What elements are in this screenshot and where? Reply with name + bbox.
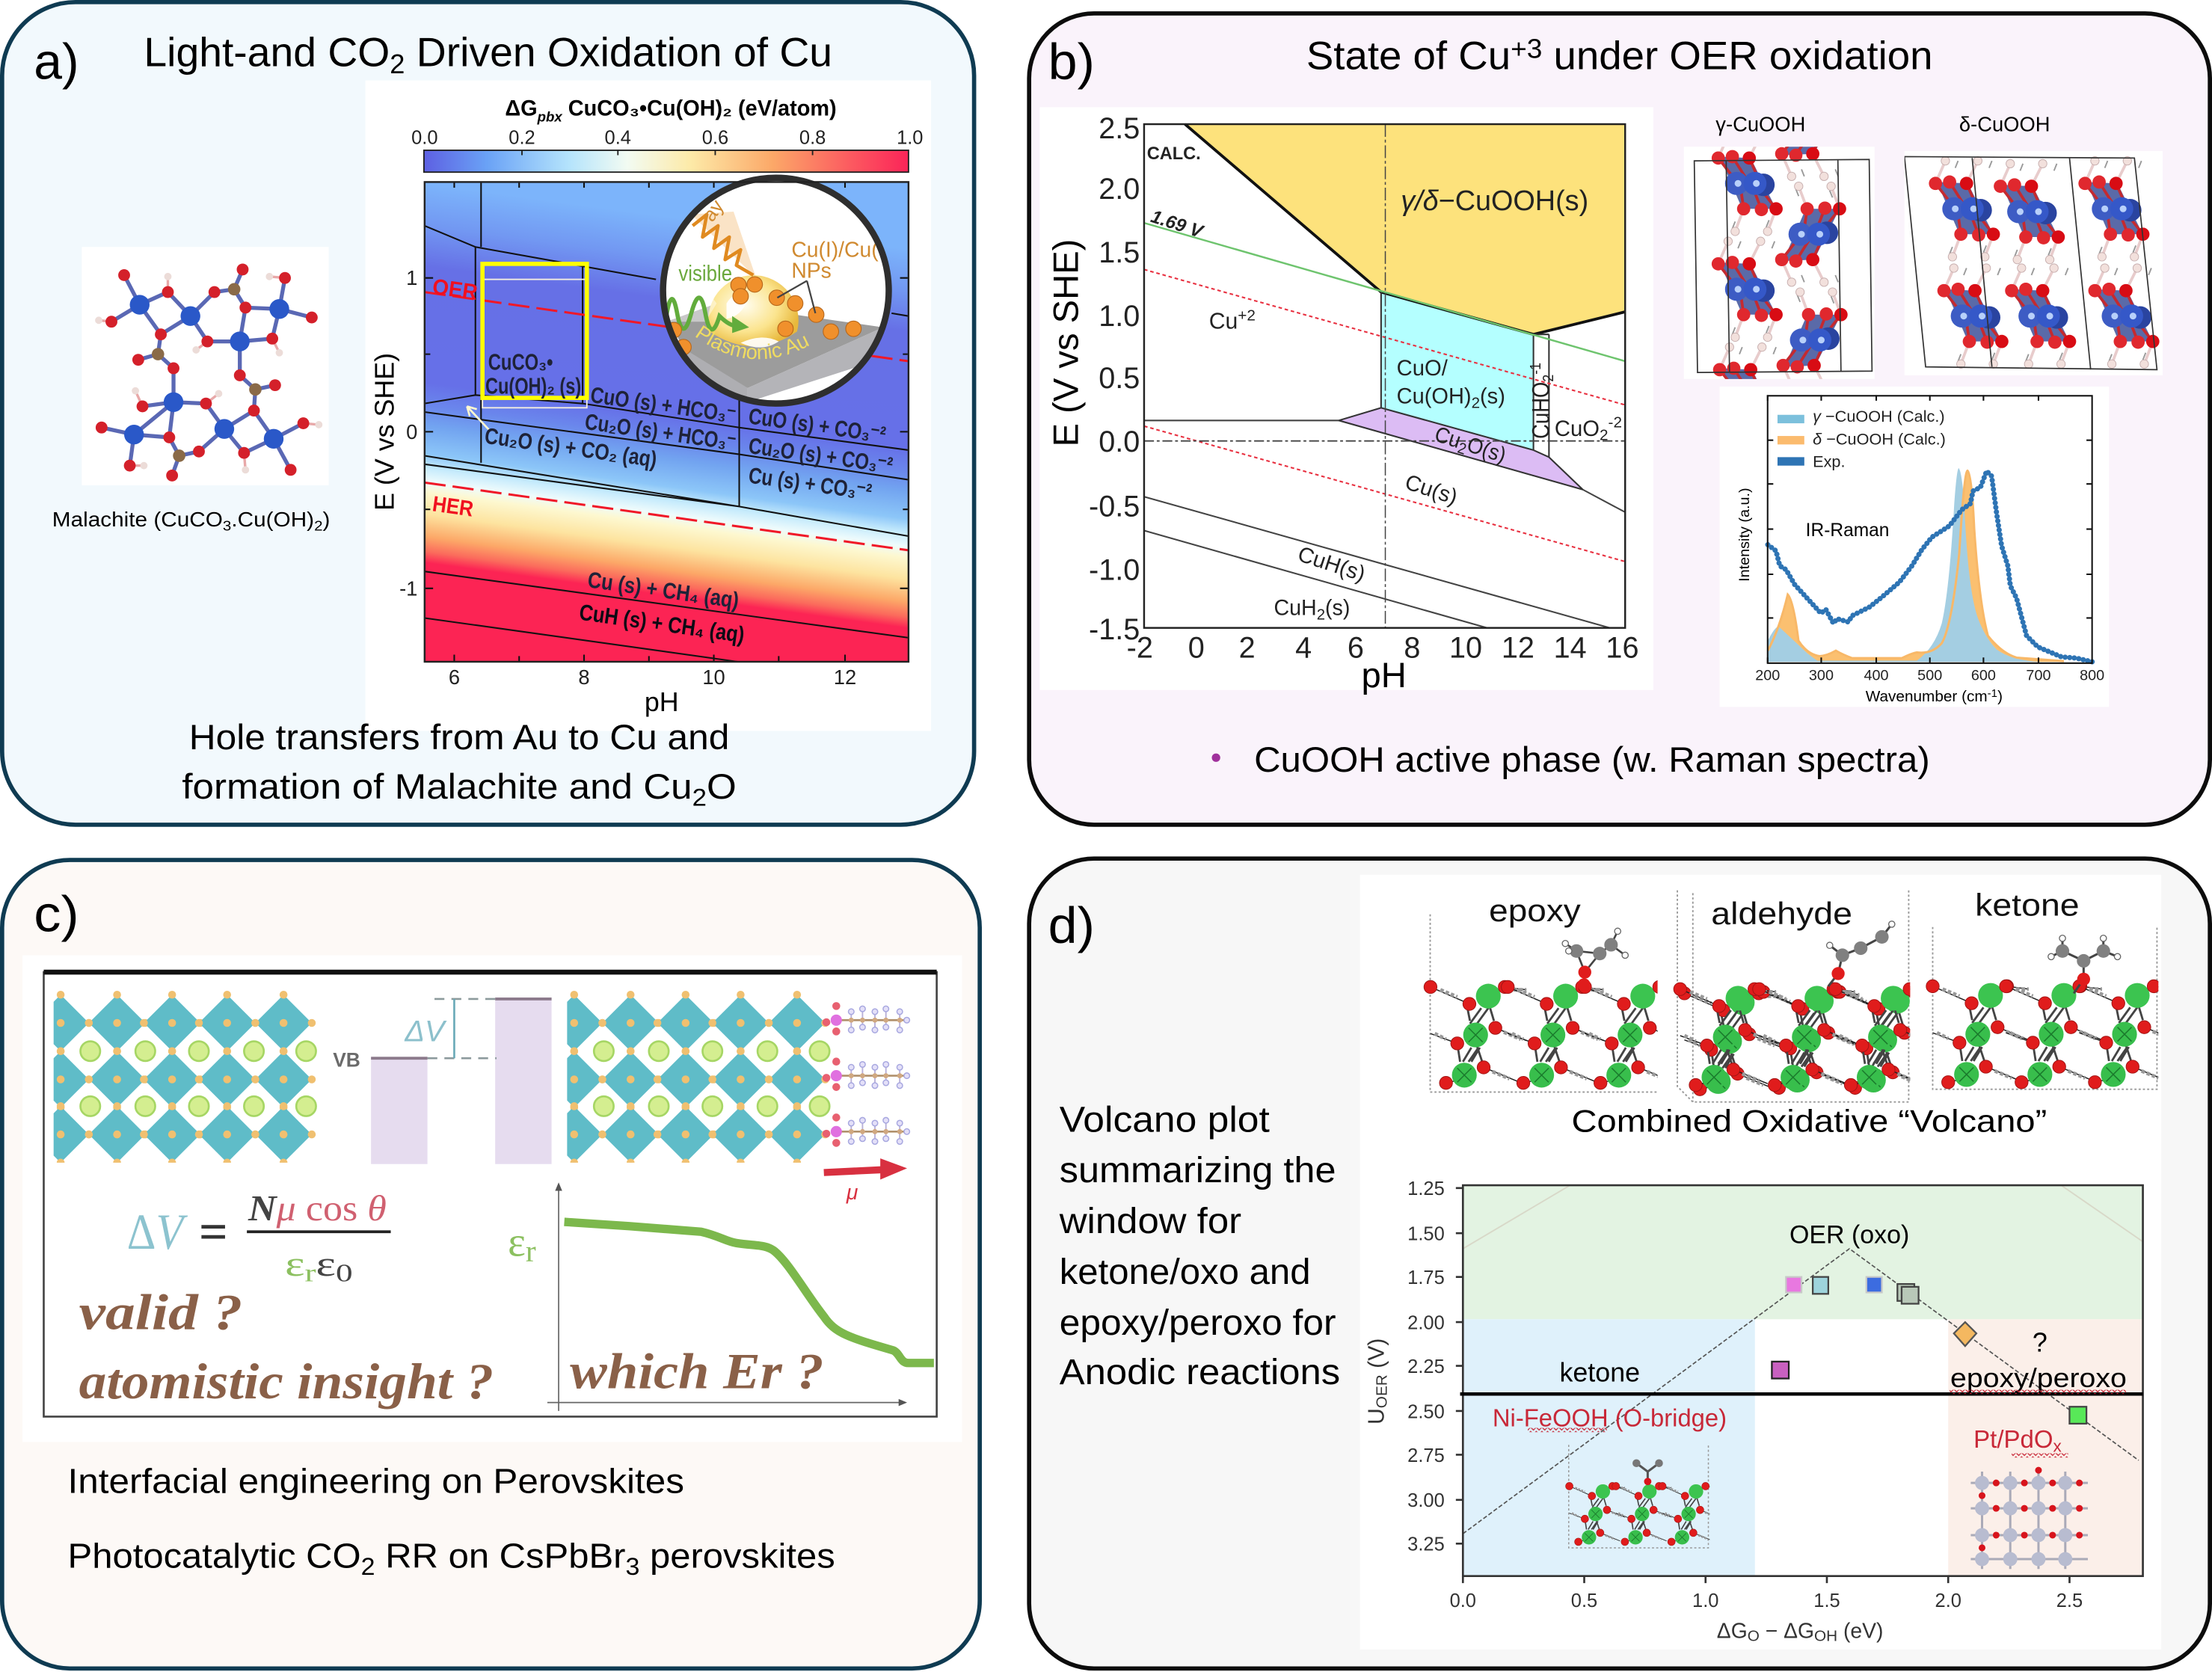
panel c text: Photocatalytic CO [68, 1536, 344, 1575]
spectrum tick labels: 800 [2080, 667, 2104, 683]
plot frame [425, 182, 909, 662]
diagram labels: (s) [1480, 385, 1505, 409]
y axis labels: 1 [406, 266, 417, 289]
calculated delta spectrum fill [1768, 470, 2064, 662]
y ticks: 1.50 [1407, 1224, 1445, 1245]
diagram labels: CuO/ [1397, 357, 1448, 381]
spectrum x title: -1 [1988, 687, 1997, 700]
volcano description: Volcano plot [1060, 1099, 1271, 1140]
epoxy peroxo label: epoxy/peroxo [1950, 1363, 2127, 1393]
ketone slab [1926, 927, 2175, 1089]
spectrum tick labels: 300 [1809, 667, 1834, 683]
spectrum x title: Wavenumber (cm [1866, 688, 1988, 705]
x title: OH [1814, 1627, 1837, 1644]
y ticks: 2.00 [1407, 1312, 1445, 1333]
phase labels [483, 350, 894, 648]
colorbar: 0.0 [411, 127, 438, 148]
x ticks: 2 [1239, 631, 1256, 664]
plasmonic Au lens inset: NPs [791, 259, 832, 283]
phase labels: Cu₂O (s) + CO₃⁻² [747, 434, 894, 479]
Pt/PdOx spell-check underline [2012, 1454, 2068, 1457]
panel a title: 2 [390, 49, 405, 79]
colorbar [411, 127, 923, 172]
panel a: light and CO2 driven oxidation of Cu [0, 0, 977, 827]
plasmonic Au lens inset: ay [698, 195, 728, 226]
diagram labels: Cu(s) [1402, 470, 1460, 510]
panel b title: State of Cu [1306, 34, 1504, 78]
malachite caption: 3 [223, 517, 231, 533]
malachite structure image [82, 247, 329, 485]
panel c text: 2 [361, 1553, 375, 1580]
gamma/delta CuOOH region [1185, 124, 1625, 334]
Pourbaix heat map figure [365, 81, 931, 731]
x ticks: 2.5 [2056, 1590, 2083, 1611]
x ticks [1450, 1590, 2083, 1611]
x ticks: 1.0 [1692, 1590, 1718, 1611]
diagram labels: 1.69 V [1149, 206, 1207, 243]
colorbar: 0.8 [799, 127, 826, 148]
CuO/Cu(OH)2 region [1381, 292, 1534, 450]
y axis title: E (V vs SHE) [369, 353, 399, 511]
perovskite left [28, 991, 316, 1167]
spectrum tick labels: 500 [1917, 667, 1942, 683]
Ni-FeOOH inset structure [1566, 1445, 1718, 1548]
gamma-CuOOH crystal structure [1684, 147, 1874, 379]
band diagram: ΔV [404, 1015, 447, 1048]
y title: OER [1373, 1374, 1390, 1408]
diagram labels: -2 [1609, 414, 1622, 431]
colorbar title: pbx [537, 108, 563, 124]
dipole arrow [824, 1158, 907, 1204]
diagram labels: CuO [1555, 417, 1600, 441]
panel b title: +3 [1511, 34, 1542, 64]
panel c text: perovskites [639, 1536, 835, 1575]
volcano chart title: Combined Oxidative “Volcano” [1572, 1103, 2047, 1138]
y ticks [1089, 112, 1140, 646]
colorbar title: ΔG [505, 97, 538, 121]
dipole equation [127, 1187, 391, 1287]
panel c letter: c) [34, 886, 79, 942]
diagram labels: Cu [1209, 310, 1238, 334]
diagram lines [1144, 124, 1625, 628]
panel c text: RR on CsPbBr [375, 1536, 625, 1575]
dipole equation: 0 [336, 1259, 353, 1287]
y ticks: -0.5 [1089, 491, 1140, 523]
spectrum y title: Intensity (a.u.) [1736, 488, 1753, 582]
spectrum legend: Exp. [1813, 452, 1846, 471]
y ticks: 1.0 [1099, 300, 1140, 333]
panel a letter: a) [34, 34, 79, 90]
panel b letter: b) [1048, 34, 1095, 90]
y axis labels: 0 [406, 420, 417, 443]
x ticks: 12 [1502, 631, 1534, 664]
diagram labels: Cu(OH) [1397, 385, 1472, 409]
y ticks: 2.50 [1407, 1401, 1445, 1422]
OER label: OER (oxo) [1789, 1220, 1909, 1249]
y ticks: 0.5 [1099, 362, 1140, 395]
x ticks: 16 [1606, 631, 1638, 664]
phase labels: Cu (s) + CH₄ (aq) [586, 568, 740, 613]
faint guide lines [1463, 1185, 2143, 1249]
plasmonic Au lens inset [660, 175, 892, 407]
band diagram: VB [333, 1049, 360, 1072]
spectrum tick labels: 400 [1864, 667, 1889, 683]
diagram labels: 2 [1600, 427, 1609, 444]
Ni-FeOOH spell-check underline [1528, 1428, 1607, 1432]
dipole arrow: μ [846, 1180, 858, 1204]
diagram labels: CuH [1274, 597, 1318, 621]
x ticks: 2.0 [1935, 1590, 1961, 1611]
Pt/PdOx label: x [2053, 1437, 2062, 1456]
phase labels: CuH (s) + CH₄ (aq) [577, 600, 746, 648]
spectrum tick labels: 700 [2026, 667, 2050, 683]
permittivity chart [508, 1182, 934, 1411]
question: atomistic insight: atomistic insight ? [79, 1353, 494, 1410]
OER and HER dashed lines: OER [431, 275, 479, 305]
y title: U [1365, 1408, 1389, 1424]
volcano description: Anodic reactions [1060, 1352, 1340, 1392]
x ticks: 0.5 [1571, 1590, 1597, 1611]
delta-CuOOH label: δ-CuOOH [1959, 112, 2050, 135]
phase labels: Cu (s) + CO₃⁻² [747, 464, 873, 505]
panel a conclusion text: O [707, 766, 737, 806]
diagram labels: 2 [1317, 606, 1325, 623]
permittivity chart: r [526, 1234, 536, 1268]
volcano description: window for [1059, 1201, 1241, 1241]
adsorbate labels: ketone [1975, 888, 2080, 923]
permittivity chart: ε [508, 1219, 526, 1265]
epoxy slab [1424, 915, 1681, 1092]
volcano figure [1360, 875, 2175, 1650]
volcano description: ketone/oxo and [1060, 1252, 1311, 1292]
colorbar title: CuCO₃•Cu(OH)₂ (eV/atom) [562, 97, 837, 121]
x ticks: 4 [1295, 631, 1312, 664]
y ticks: 3.25 [1407, 1534, 1445, 1555]
y ticks: 1.75 [1407, 1267, 1445, 1288]
ketone label: ketone [1559, 1357, 1640, 1387]
question: which Er: which Er ? [570, 1343, 824, 1400]
dipole equation: = [199, 1203, 228, 1260]
panel d: volcano plot [1029, 858, 2210, 1668]
diagram labels: CuH(s) [1295, 542, 1368, 586]
spectrum tick labels: 200 [1755, 667, 1780, 683]
bullet: CuOOH active phase: CuOOH active phase (w. Raman spectra) [1254, 740, 1930, 779]
x ticks: 0.0 [1450, 1590, 1476, 1611]
Cu2O region [1339, 408, 1583, 490]
x ticks: 6 [1348, 631, 1364, 664]
volcano description [1059, 1099, 1340, 1392]
adsorbate labels [1489, 888, 2080, 931]
panel c text: 3 [625, 1553, 639, 1580]
band diagram [333, 999, 552, 1164]
panel b: state of Cu+3 under OER oxidation [1029, 13, 2210, 825]
diagram labels: 2 [1472, 394, 1480, 411]
x ticks: -2 [1127, 631, 1153, 664]
spectrum legend: γ −CuOOH (Calc.) [1813, 407, 1945, 425]
malachite caption: .Cu(OH) [231, 508, 314, 531]
spectrum legend: δ −CuOOH (Calc.) [1813, 429, 1946, 448]
x ticks: 1.5 [1813, 1590, 1840, 1611]
threshold line [1460, 1393, 2143, 1395]
adsorbate labels: epoxy [1489, 893, 1581, 928]
x ticks: 10 [1449, 631, 1482, 664]
phase labels: CuO (s) + HCO₃⁻ [589, 383, 737, 428]
x title: (eV) [1837, 1619, 1883, 1643]
OER and HER dashed lines [425, 275, 909, 550]
selected window yellow box [482, 264, 587, 408]
x axis labels: 6 [449, 666, 460, 689]
Ni-FeOOH label: Ni-FeOOH (O-bridge) [1493, 1404, 1727, 1432]
colorbar: 0.2 [509, 127, 535, 148]
spectrum legend [1778, 407, 1946, 471]
OER and HER dashed lines: HER [431, 492, 475, 522]
question: valid: valid ? [79, 1283, 242, 1340]
colorbar: 1.0 [897, 127, 923, 148]
calculated delta spectrum outline [1768, 470, 2064, 661]
panel a conclusion text: Hole transfers from Au to Cu and [189, 717, 729, 757]
plasmonic Au lens inset: visible [678, 262, 732, 286]
x title: pH [1361, 655, 1407, 695]
ketone blue window [1463, 1319, 1755, 1576]
colorbar: 0.6 [702, 127, 728, 148]
y ticks: 1.5 [1099, 236, 1140, 269]
malachite caption: 2 [314, 517, 323, 533]
figure frame [43, 972, 937, 1416]
x ticks: 14 [1554, 631, 1587, 664]
epoxy peroxo spell-check underline [1950, 1390, 2126, 1394]
x ticks [1127, 631, 1638, 664]
perovskite right [542, 991, 829, 1167]
malachite caption: Malachite (CuCO [52, 508, 209, 531]
diagram labels: 2 [1455, 440, 1469, 458]
diagram labels: (s) [1325, 597, 1350, 621]
panel a title: Driven Oxidation of Cu [405, 29, 832, 76]
diagram labels: O(s) [1464, 433, 1509, 468]
y title: E (V vs SHE) [1045, 239, 1085, 446]
volcano description: summarizing the [1060, 1150, 1336, 1190]
y ticks: 2.75 [1407, 1445, 1445, 1466]
plasmonic Au lens inset: Plasmonic Au [695, 325, 809, 359]
OER green window [1463, 1185, 2143, 1319]
diagram labels: CALC. [1147, 144, 1201, 163]
y ticks: -1.0 [1089, 554, 1140, 587]
x axis labels: 8 [578, 666, 590, 689]
phase labels: Cu(OH)₂ (s) [485, 374, 581, 399]
plasmonic Au lens inset: Cu(I)/Cu(I [791, 237, 885, 261]
dipole equation: ε [316, 1245, 336, 1284]
diagram labels: +2 [1238, 307, 1256, 324]
experimental spectrum [1768, 471, 2092, 662]
Pourbaix diagram [1039, 107, 1653, 695]
arrow to Cu2O field [467, 406, 490, 431]
data markers [1772, 1277, 2086, 1424]
delta-CuOOH crystal structure [1905, 151, 2163, 375]
gamma-CuOOH label: γ-CuOOH [1715, 112, 1805, 135]
diagram labels: 2 [1540, 375, 1557, 382]
question mark: ? [2033, 1328, 2047, 1358]
panel a conclusion text: 2 [692, 784, 707, 811]
diagram labels: γ/δ−CuOOH(s) [1401, 185, 1588, 216]
heat map field [425, 182, 909, 662]
x axis title: pH [645, 687, 679, 717]
Pt/PdOx inset structure [1970, 1467, 2088, 1569]
x axis labels: 10 [702, 666, 725, 689]
phase labels: Cu₂O (s) + CO₂ (aq) [483, 424, 658, 473]
y ticks: 1.25 [1407, 1178, 1445, 1199]
y axis labels: -1 [399, 577, 417, 600]
dipole equation: ΔV [127, 1203, 188, 1260]
spectrum frame and ticks [1768, 395, 2092, 663]
panel c: interfacial engineering on perovskites [2, 860, 980, 1668]
x axis labels: 12 [834, 666, 856, 689]
phase labels: CuCO₃• [488, 350, 553, 375]
spectrum tick labels: 600 [1971, 667, 1996, 683]
diagram labels: Cu [1432, 422, 1466, 454]
phase labels: Cu₂O (s) + HCO₃⁻ [583, 410, 737, 455]
diagram labels: CuHO [1527, 372, 1554, 439]
panel c text: Interfacial engineering on Perovskites [68, 1461, 684, 1500]
panel d letter: d) [1048, 897, 1095, 953]
y ticks: 3.00 [1407, 1490, 1445, 1511]
x title: − ΔG [1760, 1619, 1814, 1643]
panel a title: Light-and CO [144, 29, 387, 76]
dipole figure [22, 955, 962, 1442]
malachite caption: ) [323, 508, 330, 531]
x title: O [1748, 1627, 1760, 1644]
frame [1456, 1185, 2143, 1583]
Raman spectrum chart [1720, 387, 2109, 707]
diagram labels [1147, 144, 1622, 623]
dipole equation: r [304, 1259, 316, 1287]
adsorbate labels: aldehyde [1711, 896, 1852, 931]
panel a conclusion text: formation of Malachite and Cu [182, 766, 652, 806]
spectrum tick labels [1755, 667, 2104, 683]
volcano description: epoxy/peroxo for [1060, 1303, 1336, 1343]
aldehyde slab [1674, 891, 1935, 1102]
panel b title: under OER oxidation [1542, 34, 1932, 78]
spectrum x title: ) [1997, 688, 2003, 705]
x ticks: 0 [1188, 631, 1205, 664]
volcano chart [1365, 1178, 2143, 1644]
y title: (V) [1365, 1338, 1389, 1374]
IR-Raman label: IR-Raman [1806, 520, 1889, 541]
calculated gamma spectrum fill [1768, 468, 2042, 662]
colorbar: 0.4 [605, 127, 631, 148]
diagram labels: -1 [1527, 363, 1544, 375]
y ticks: 2.25 [1407, 1356, 1445, 1377]
dipole equation: ε [285, 1245, 300, 1284]
x title: ΔG [1717, 1619, 1748, 1643]
y ticks: 0.0 [1099, 425, 1140, 458]
x ticks: 8 [1404, 631, 1420, 664]
y ticks: -1.5 [1089, 613, 1140, 646]
surface ligands [823, 1002, 909, 1147]
y axis labels [399, 266, 417, 600]
panel c text [68, 1461, 835, 1580]
phase labels: CuO (s) + CO₃⁻² [747, 404, 888, 448]
phase boundary lines [425, 182, 909, 662]
panel a conclusion text [182, 717, 737, 811]
epoxy peach window [1948, 1319, 2143, 1576]
Pt/PdOx label: Pt/PdO [1973, 1425, 2053, 1453]
y ticks: 2.5 [1099, 112, 1140, 145]
x axis labels [449, 666, 856, 689]
dipole equation: Nμ cos θ [248, 1187, 387, 1229]
y ticks: 2.0 [1099, 173, 1140, 206]
y ticks [1407, 1178, 1445, 1555]
volcano dashed lines [1463, 1249, 2139, 1534]
